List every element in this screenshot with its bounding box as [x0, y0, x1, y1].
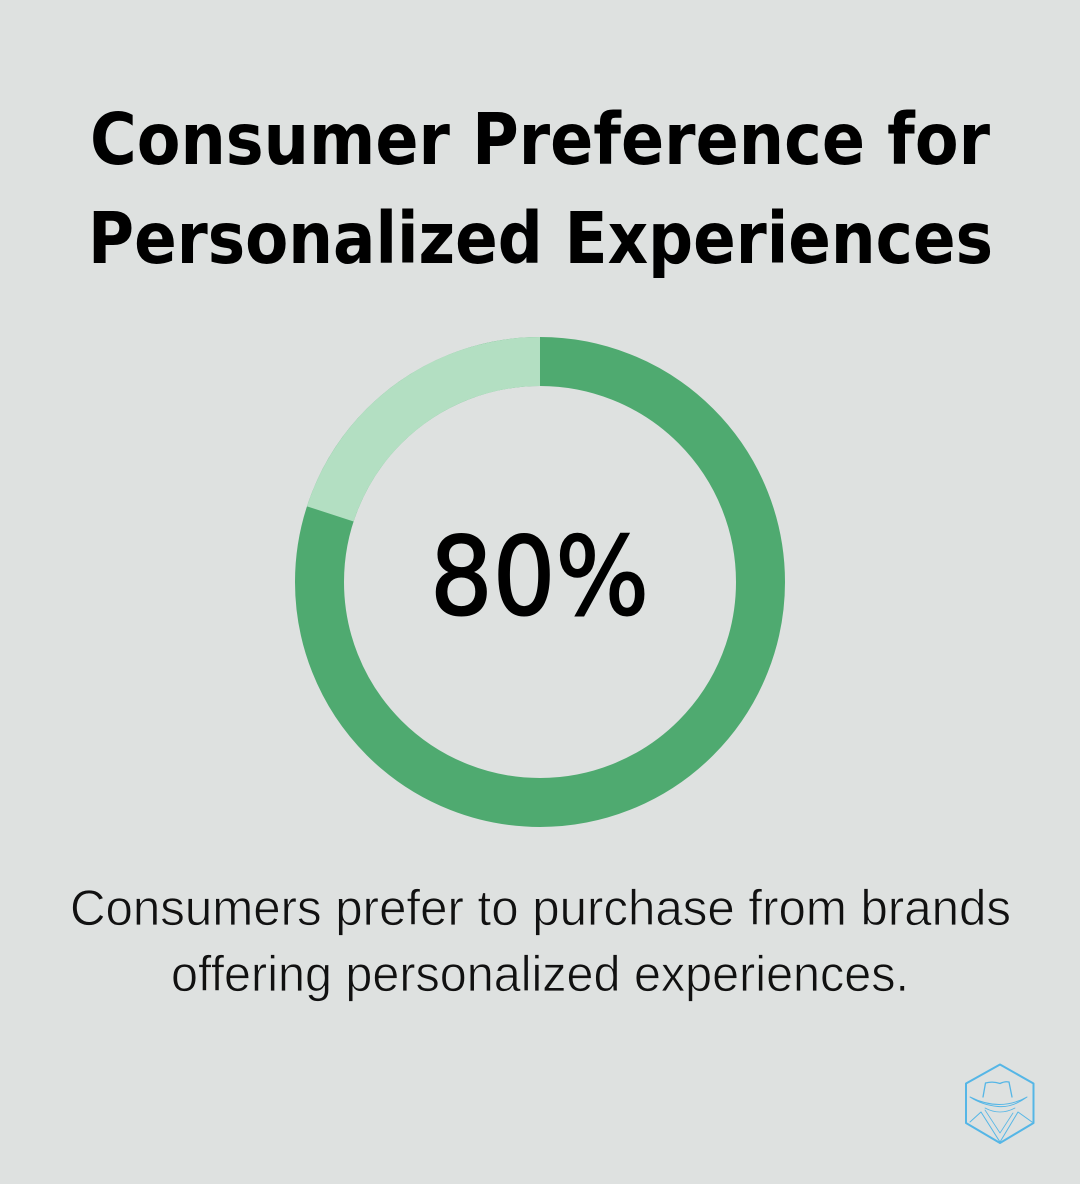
center value: 80%: 80% — [430, 515, 649, 640]
description text: offering personalized experiences. — [171, 946, 909, 1002]
title: Consumer Preference for — [90, 98, 990, 181]
description text: Consumers prefer to purchase from brands — [70, 880, 1011, 936]
description text — [70, 880, 1011, 1002]
donut chart: 80% — [320, 362, 760, 802]
title — [88, 98, 993, 280]
title: Personalized Experiences — [88, 197, 993, 280]
icon: hexagon logo with hat — [966, 1064, 1034, 1143]
